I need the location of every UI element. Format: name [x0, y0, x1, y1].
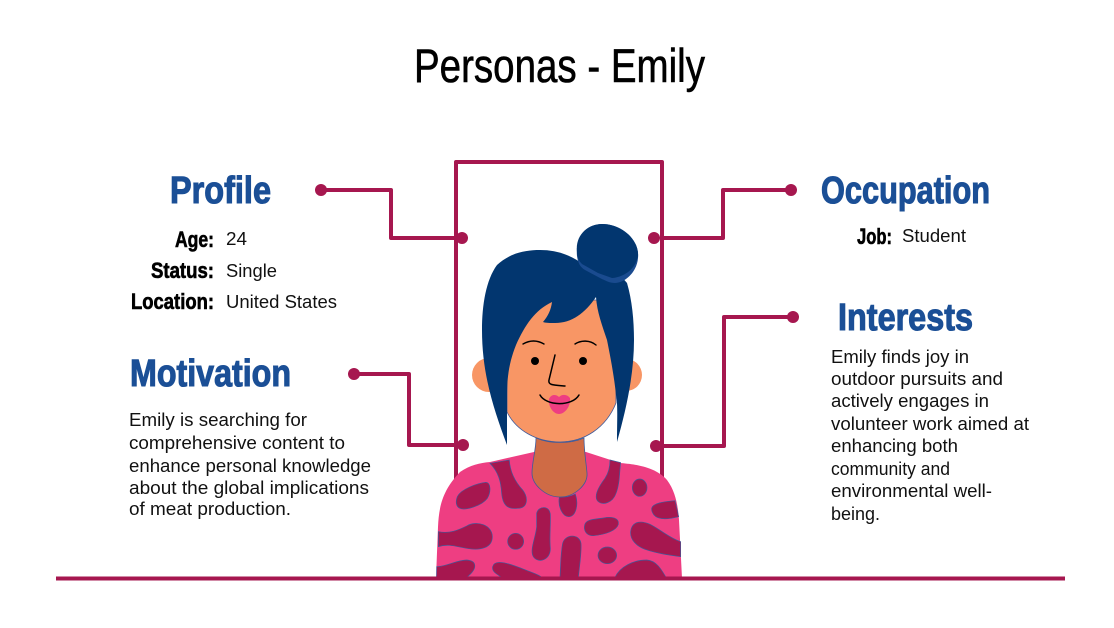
motivation text: Emily is searching for — [129, 410, 307, 430]
motivation text — [129, 410, 371, 519]
age: 24 — [226, 229, 247, 249]
location — [131, 289, 337, 314]
portrait frame — [456, 162, 662, 480]
status — [151, 258, 277, 283]
panel: motivation — [129, 353, 371, 519]
interests text: Emily finds joy in — [831, 347, 969, 367]
baseline rule — [56, 576, 1065, 580]
ears — [472, 358, 642, 392]
interests text: volunteer work aimed at — [831, 414, 1029, 434]
motivation text: of meat production. — [129, 499, 291, 519]
panel: profile — [131, 170, 337, 314]
lips — [549, 395, 570, 414]
location: United States — [226, 292, 337, 312]
panel: interests — [831, 297, 1029, 524]
heading: occupation: Occupation — [821, 170, 990, 212]
job: Student — [902, 226, 966, 246]
interests text: environmental well- — [831, 481, 992, 501]
hair — [482, 250, 634, 445]
status: Status: — [151, 258, 214, 283]
interests text: community and — [831, 459, 950, 479]
connector: interests — [650, 311, 799, 452]
age — [175, 227, 247, 252]
eyes — [531, 357, 587, 365]
motivation text: about the global implications — [129, 478, 369, 498]
status: Single — [226, 261, 277, 281]
face — [507, 300, 616, 442]
heading: profile: Profile — [170, 170, 271, 212]
job — [857, 224, 966, 249]
hair bun — [577, 224, 638, 283]
motivation text: enhance personal knowledge — [129, 456, 371, 476]
torso — [436, 452, 682, 578]
neck — [532, 438, 587, 497]
connector: profile — [315, 184, 468, 244]
heading: motivation: Motivation — [130, 353, 291, 395]
interests text — [831, 347, 1029, 524]
job: Job: — [857, 224, 892, 249]
illustration: Emily — [436, 224, 682, 578]
eyebrows — [523, 341, 596, 345]
dress pattern — [437, 460, 681, 577]
motivation text: comprehensive content to — [129, 433, 345, 453]
nose — [549, 355, 565, 386]
location: Location: — [131, 289, 214, 314]
smile — [540, 395, 579, 404]
connector: motivation — [348, 368, 469, 451]
heading: interests: Interests — [838, 297, 973, 339]
connector: occupation — [648, 184, 797, 244]
age: Age: — [175, 227, 214, 252]
interests text: outdoor pursuits and — [831, 369, 1003, 389]
interests text: being. — [831, 504, 880, 524]
interests text: actively engages in — [831, 391, 989, 411]
interests text: enhancing both — [831, 436, 958, 456]
panel: occupation — [821, 170, 990, 249]
title: Personas - Emily — [414, 39, 705, 92]
